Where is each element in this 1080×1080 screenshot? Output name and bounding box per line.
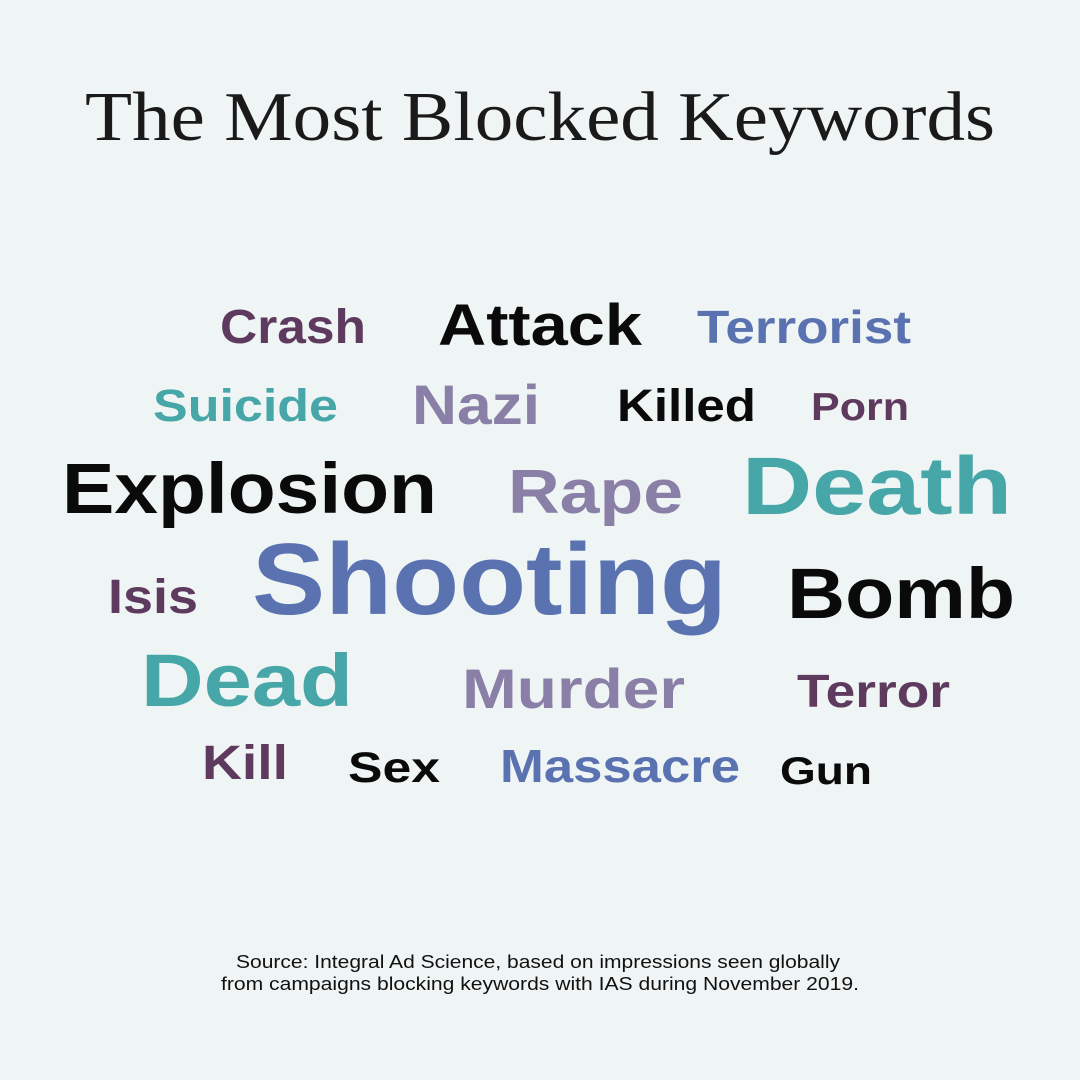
word: Explosion: Explosion: [62, 450, 437, 529]
word: Isis: Isis: [108, 571, 198, 624]
word: Porn: Porn: [811, 386, 909, 429]
word: Kill: Kill: [202, 737, 288, 790]
word: Murder: Murder: [462, 657, 685, 720]
source note: from campaigns blocking keywords with IAS during November 2019.: [221, 974, 859, 994]
word: Dead: Dead: [141, 639, 353, 722]
word: Rape: Rape: [508, 458, 683, 527]
word: Shooting: Shooting: [252, 524, 727, 636]
word: Crash: Crash: [220, 301, 366, 354]
word: Massacre: Massacre: [500, 740, 740, 792]
word: Bomb: Bomb: [787, 555, 1015, 634]
source note: [221, 952, 859, 994]
word: Death: Death: [742, 441, 1012, 532]
title: The Most Blocked Keywords: [85, 79, 995, 156]
word: Killed: Killed: [617, 380, 756, 431]
source note: Source: Integral Ad Science, based on impressions seen globally: [236, 952, 840, 972]
word: Sex: Sex: [348, 744, 440, 792]
word: Terror: Terror: [797, 665, 950, 717]
word: Suicide: Suicide: [153, 380, 338, 431]
word: Attack: Attack: [438, 293, 643, 358]
word: Nazi: Nazi: [412, 373, 540, 436]
word cloud: [62, 293, 1015, 793]
word: Gun: Gun: [780, 750, 872, 793]
word: Terrorist: Terrorist: [697, 301, 911, 353]
